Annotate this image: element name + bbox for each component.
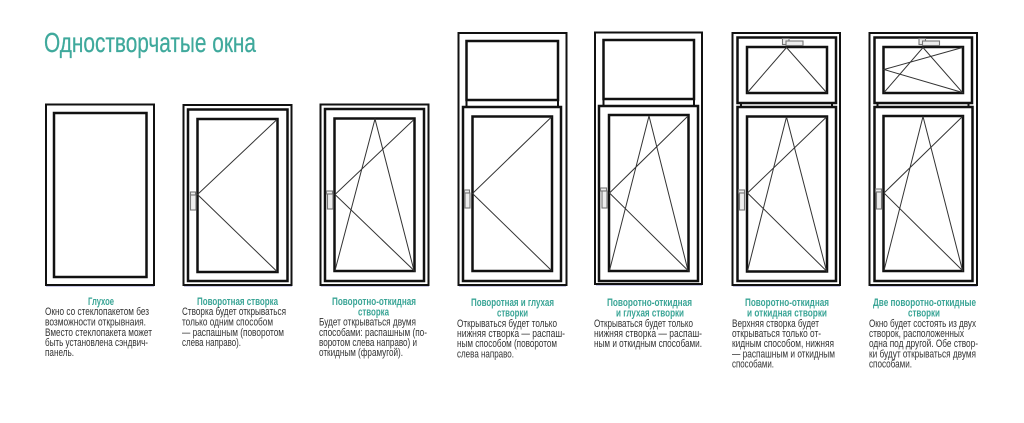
text block: turn-tilt and tilt sashes: — распашным и откидным bbox=[732, 348, 835, 360]
text block: turning and fixed sashes bbox=[457, 297, 565, 360]
text block: turn-tilt sash: откидным (фрамугой). bbox=[319, 347, 403, 359]
text block: turn-tilt and tilt sashes: Верхняя створка будет bbox=[732, 318, 819, 330]
text block: turn-tilt and fixed sashes: ным и откидным способами. bbox=[594, 338, 702, 350]
text block: turn-tilt and fixed sashes: Открываться будет только bbox=[594, 318, 693, 330]
text block: turning sash: — распашным (поворотом bbox=[182, 327, 284, 339]
text block: fixed window: Вместо стеклопакета может bbox=[45, 327, 152, 339]
text block: two turn-tilt sashes: одна под другой. Обе створ- bbox=[869, 338, 978, 350]
panel: two turn-tilt sashes window bbox=[870, 33, 977, 286]
panel: fixed window bbox=[46, 104, 154, 286]
text block: turn-tilt sash: способами: распашным (по- bbox=[319, 327, 427, 339]
text block: turning and fixed sashes: нижняя створка — распаш- bbox=[457, 328, 565, 340]
text block: turning sash bbox=[182, 296, 286, 349]
panel: turn-tilt and fixed sashes window bbox=[595, 32, 702, 286]
text block: turn-tilt and tilt sashes: и откидная створки bbox=[747, 308, 827, 320]
text block: turn-tilt and fixed sashes bbox=[594, 297, 702, 350]
text block: fixed window: Окно со стеклопакетом без bbox=[45, 306, 149, 318]
text block: turn-tilt sash: Поворотно-откидная bbox=[332, 296, 416, 308]
text block: turn-tilt sash: воротом слева направо) и bbox=[319, 337, 417, 349]
text block: turning and fixed sashes: ным способом (поворотом bbox=[457, 338, 557, 350]
text block: turning sash: Поворотная створка bbox=[197, 296, 279, 308]
text block: turn-tilt and fixed sashes: Поворотно-откидная bbox=[607, 297, 692, 309]
text block: turning and fixed sashes: слева направо. bbox=[457, 348, 514, 360]
text block: two turn-tilt sashes: Окно будет состоять из двух bbox=[869, 318, 976, 330]
text block: turn-tilt and tilt sashes: открываться только от- bbox=[732, 328, 821, 340]
text block: turning and fixed sashes: Поворотная и глухая bbox=[471, 297, 554, 309]
text block: two turn-tilt sashes: Две поворотно-откидные bbox=[873, 297, 976, 309]
text block: two turn-tilt sashes: способами. bbox=[869, 358, 912, 370]
text block: turn-tilt and fixed sashes: и глухая створки bbox=[616, 308, 684, 320]
text block: turn-tilt and tilt sashes: кидным способом, нижняя bbox=[732, 338, 834, 350]
text block: turning sash: Створка будет открываться bbox=[182, 306, 286, 318]
title: Одностворчатые окна bbox=[44, 27, 256, 58]
text block: turn-tilt and tilt sashes: Поворотно-откидная bbox=[745, 297, 829, 309]
text block: fixed window: быть установлена сэндвич- bbox=[45, 337, 148, 349]
text block: turn-tilt sash: Будет открываться двумя bbox=[319, 316, 416, 328]
text block: turn-tilt and tilt sashes: способами. bbox=[732, 358, 774, 370]
text block: fixed window: Глухое bbox=[88, 296, 114, 308]
text block: turning and fixed sashes: Открываться будет только bbox=[457, 318, 557, 330]
text block: two turn-tilt sashes: ки будут открываться двумя bbox=[869, 348, 976, 360]
text block: turning sash: только одним способом bbox=[182, 316, 273, 328]
text block: turn-tilt sash bbox=[319, 296, 427, 359]
text block: two turn-tilt sashes: створки bbox=[908, 308, 940, 320]
text block: two turn-tilt sashes bbox=[869, 297, 978, 370]
text block: turning sash: слева направо). bbox=[182, 337, 241, 349]
text block: two turn-tilt sashes: створок, расположенных bbox=[869, 328, 964, 340]
panel: turn-tilt window bbox=[320, 104, 429, 286]
text block: fixed window: возможности открывнаия. bbox=[45, 316, 146, 328]
panel: turning and fixed sashes window bbox=[458, 33, 566, 286]
panel: turn-tilt and tilt sashes window bbox=[732, 33, 840, 286]
text block: turn-tilt and fixed sashes: нижняя створка — распаш- bbox=[594, 328, 702, 340]
panel: turning sash window bbox=[184, 105, 292, 286]
text block: turn-tilt sash: створка bbox=[358, 306, 390, 318]
text block: fixed window bbox=[45, 296, 152, 359]
text block: turn-tilt and tilt sashes bbox=[732, 297, 835, 370]
text block: turning and fixed sashes: створки bbox=[497, 308, 528, 320]
text block: fixed window: панель. bbox=[45, 347, 74, 359]
